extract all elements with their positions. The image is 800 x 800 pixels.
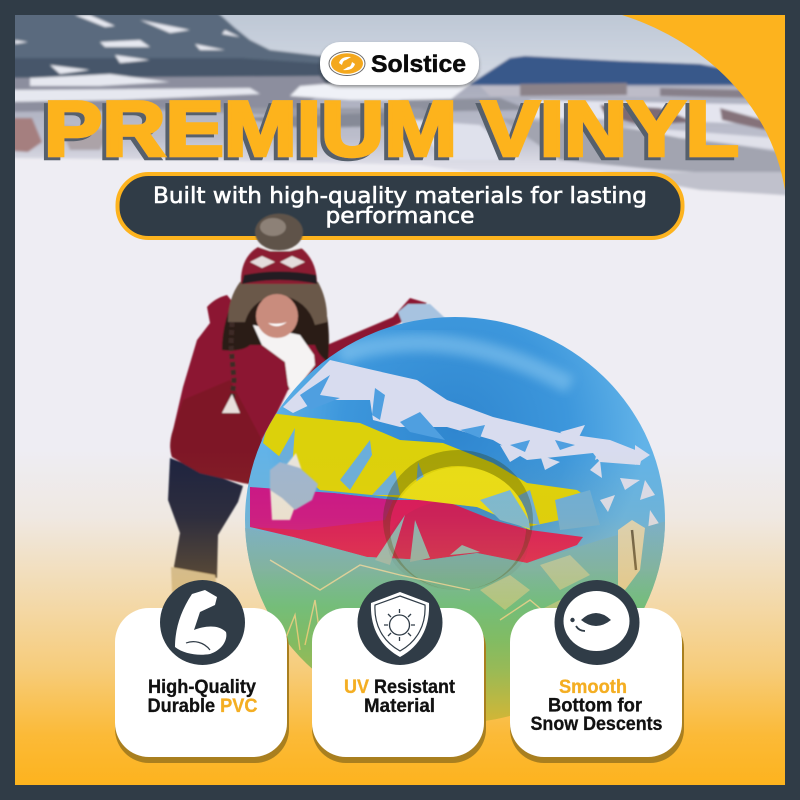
card shadow (312, 614, 486, 763)
label: UV Resistant (344, 677, 456, 698)
banner text: Built with high-quality materials for lasting (153, 184, 647, 209)
icon: shield with sun (371, 592, 429, 657)
hole inner blue (480, 490, 530, 528)
arm detail (186, 642, 210, 650)
handle strap (632, 530, 636, 570)
trousers (168, 458, 243, 578)
icon circle (554, 580, 640, 665)
card: high-quality durable PVC (115, 580, 289, 763)
card shadow (115, 614, 289, 763)
lower glove (270, 462, 318, 510)
hole shadow crescent (383, 450, 533, 590)
fur hat flaps and hair (221, 296, 330, 360)
lower blue-green band (245, 520, 670, 730)
yellow corner (622, 15, 785, 190)
card body (312, 608, 484, 757)
lower glove and bottle (270, 453, 318, 520)
upper glove (397, 302, 445, 324)
smile (268, 322, 287, 326)
knit hat (241, 244, 317, 284)
card: UV resistant material: Material (364, 696, 435, 717)
side handle (618, 520, 645, 590)
icon circle (160, 580, 245, 665)
icon: snow tube (564, 591, 630, 651)
bottle (270, 453, 305, 520)
blue wedges in yellow band (278, 428, 600, 530)
card: UV resistant material (312, 580, 486, 763)
subtitle banner: performance (326, 204, 474, 229)
boot (171, 567, 218, 595)
braid tassel (222, 394, 240, 413)
hole inner yellow (401, 467, 530, 530)
wedge cut-outs in magenta (375, 515, 480, 565)
hole inner (401, 467, 530, 530)
braid (231, 322, 234, 400)
child in red jacket (168, 241, 445, 595)
face (256, 294, 298, 338)
banner pill (118, 174, 682, 238)
snow-white band (283, 360, 643, 465)
logo pill (320, 42, 479, 85)
scarf (253, 325, 315, 395)
pom-pom overlapping banner (255, 214, 303, 250)
bottom yellow gradient overlay (15, 450, 785, 785)
magenta band (250, 487, 583, 563)
top highlight (340, 343, 570, 385)
tube body (245, 317, 665, 668)
title: PREMIUM VINYL (44, 84, 739, 172)
card shadow (510, 614, 684, 763)
lower cream patches (480, 555, 590, 610)
icon circle (358, 580, 442, 665)
label: High-Quality (148, 677, 256, 698)
logo wordmark: Solstice (371, 51, 466, 78)
subtitle banner (118, 174, 682, 238)
jacket (170, 295, 427, 487)
card: smooth bottom (510, 580, 684, 763)
card: smooth bottom: Snow Descents (530, 714, 662, 735)
card: smooth bottom: Bottom for (548, 696, 643, 716)
icon: flexed arm (175, 590, 226, 655)
logo mark (329, 52, 365, 76)
distant landscape (15, 15, 785, 196)
white flecks (500, 425, 660, 530)
card: high-quality durable PVC: Durable PVC (148, 696, 258, 717)
blue cut-outs in snow band (300, 375, 575, 452)
card body (115, 608, 287, 757)
label: Smooth (559, 677, 627, 698)
grass outline (270, 560, 541, 650)
snowfield background (15, 193, 785, 767)
snow tube (245, 317, 670, 730)
hole lower shading (388, 502, 528, 562)
card body (510, 608, 682, 757)
logo badge (320, 42, 479, 85)
yellow band (263, 413, 590, 527)
